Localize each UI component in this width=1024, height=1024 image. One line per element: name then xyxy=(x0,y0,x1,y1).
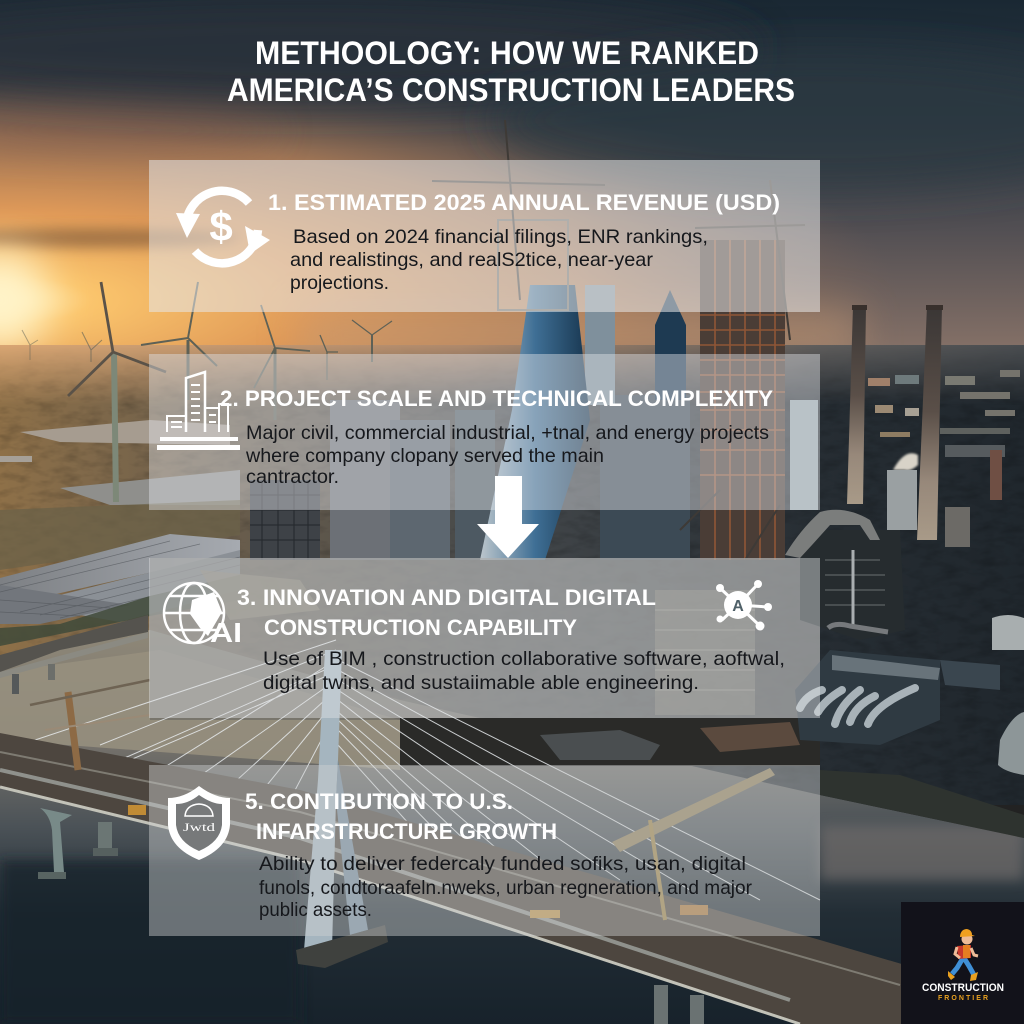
heading 3: 3. INNOVATION AND DIGITAL DIGITAL xyxy=(237,585,656,610)
icon: globe with AI xyxy=(164,583,242,648)
background: power plant with chimneys xyxy=(785,305,1024,838)
background: left road bridge xyxy=(0,615,148,694)
body text 5 xyxy=(259,853,752,921)
body text 2: where company clopany served the main xyxy=(245,445,604,467)
body text 2: Major civil, commercial industrial, +tnal, and energy projects xyxy=(246,422,769,444)
panel: 1. estimated revenue xyxy=(149,160,820,312)
heading 5 xyxy=(245,789,557,844)
panel: 3. innovation xyxy=(149,558,820,718)
body text 5: Ability to deliver federcaly funded sofiks, usan, digital xyxy=(259,853,746,875)
logo: Construction Frontier xyxy=(901,902,1024,1024)
icon: shield with capitol: Jwtd xyxy=(183,820,215,834)
icon: city buildings xyxy=(157,372,240,450)
panel: 2. project scale xyxy=(149,354,820,510)
icon: walking construction worker xyxy=(948,929,978,981)
body text 2: cantractor. xyxy=(246,466,339,488)
heading 3: CONSTRUCTION CAPABILITY xyxy=(264,615,577,640)
heading 1: 1. ESTIMATED 2025 ANNUAL REVENUE (USD) xyxy=(268,190,780,215)
background: land and distant city xyxy=(0,345,1024,805)
title: METHOOLOGY: HOW WE RANKED xyxy=(255,35,759,71)
icon: globe with AI: AI xyxy=(210,617,242,648)
title xyxy=(227,35,795,108)
body text 1: Based on 2024 financial filings, ENR rankings, xyxy=(293,226,708,248)
heading 5: 5. CONTIBUTION TO U.S. xyxy=(245,789,513,814)
icon: network node with letter A xyxy=(716,580,772,630)
heading 5: INFARSTRUCTURE GROWTH xyxy=(256,819,557,844)
body text 3: digital twins, and sustaiimable able engineering. xyxy=(263,672,699,694)
background: sunset sky xyxy=(0,0,1024,370)
background: cable-stayed bridge xyxy=(0,640,1024,1024)
title: AMERICA’S CONSTRUCTION LEADERS xyxy=(227,72,795,108)
icon: network node with letter A: A xyxy=(732,598,744,615)
background: wind turbines xyxy=(22,282,392,502)
icon: dollar with circular arrows xyxy=(176,191,270,263)
body text 1: projections. xyxy=(290,272,389,294)
body text 1: and realistings, and realS2tice, near-year xyxy=(290,249,654,271)
background: central skyline under construction xyxy=(150,120,820,766)
panel: 5. infrastructure xyxy=(149,765,820,936)
logo wordmark: CONSTRUCTION xyxy=(922,982,1004,994)
body text 3 xyxy=(263,648,785,694)
body text 2 xyxy=(245,422,769,488)
logo: Construction Frontier: FRONTIER xyxy=(938,995,988,1002)
body text 5: funols, condtoraafeln.nweks, urban regneration, and major xyxy=(259,877,752,899)
body text 1 xyxy=(290,226,708,294)
icon: dollar with circular arrows: $ xyxy=(209,203,233,250)
downward arrow xyxy=(477,476,539,558)
heading 2: 2. PROJECT SCALE AND TECHNICAL COMPLEXITY xyxy=(220,386,773,411)
icon: shield with capitol xyxy=(168,786,230,860)
body text 3: Use of BIM , construction collaborative software, aoftwal, xyxy=(263,648,785,670)
background: solar farm xyxy=(0,534,240,646)
body text 5: public assets. xyxy=(259,899,372,921)
background: river xyxy=(0,630,1024,1024)
heading 3 xyxy=(237,585,656,640)
